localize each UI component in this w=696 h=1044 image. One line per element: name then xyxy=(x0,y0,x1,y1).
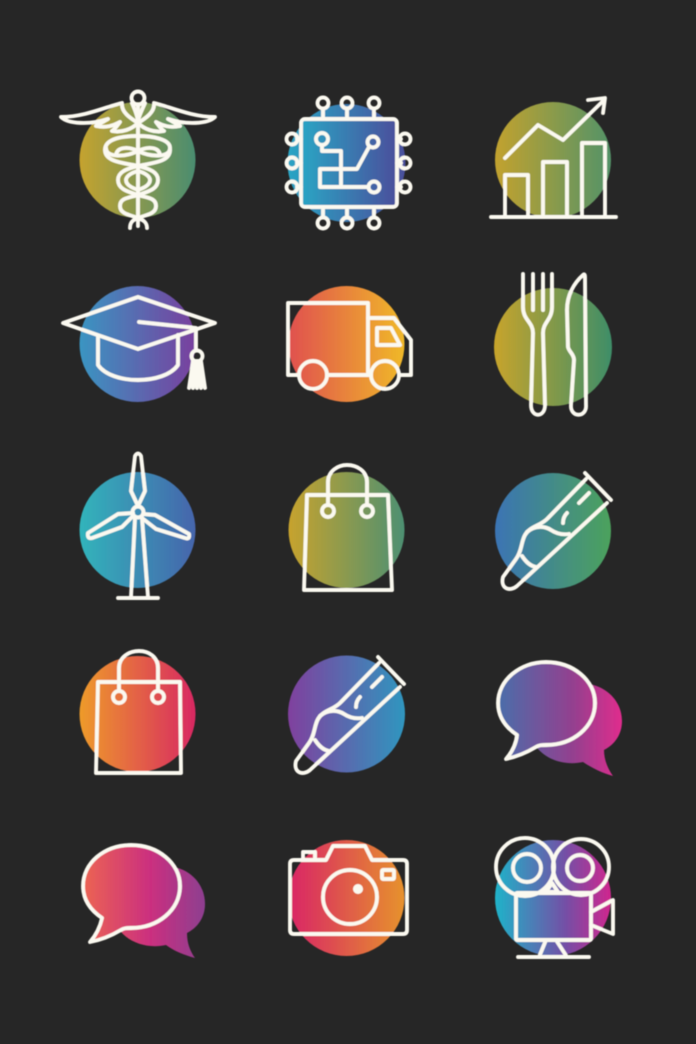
icon: wind turbine xyxy=(80,454,196,598)
icon: speech bubbles coral xyxy=(83,845,205,958)
icon: delivery truck xyxy=(288,286,411,402)
icon: caduceus xyxy=(61,92,215,228)
icon: microchip xyxy=(286,98,410,228)
icon: film projector xyxy=(495,838,613,957)
icon: shopping bag olive xyxy=(288,465,404,590)
camera lens highlight xyxy=(353,884,363,894)
icon: test tube purple blue xyxy=(288,656,405,773)
icon: graduation cap xyxy=(63,286,215,402)
icon: test tube blue green xyxy=(495,473,611,589)
icon: bar chart with arrow xyxy=(491,98,616,218)
icon: speech bubbles purple xyxy=(498,662,622,776)
icon: fork and knife xyxy=(494,274,612,415)
icon: shopping bag orange xyxy=(80,651,196,773)
icon: camera xyxy=(288,840,407,956)
